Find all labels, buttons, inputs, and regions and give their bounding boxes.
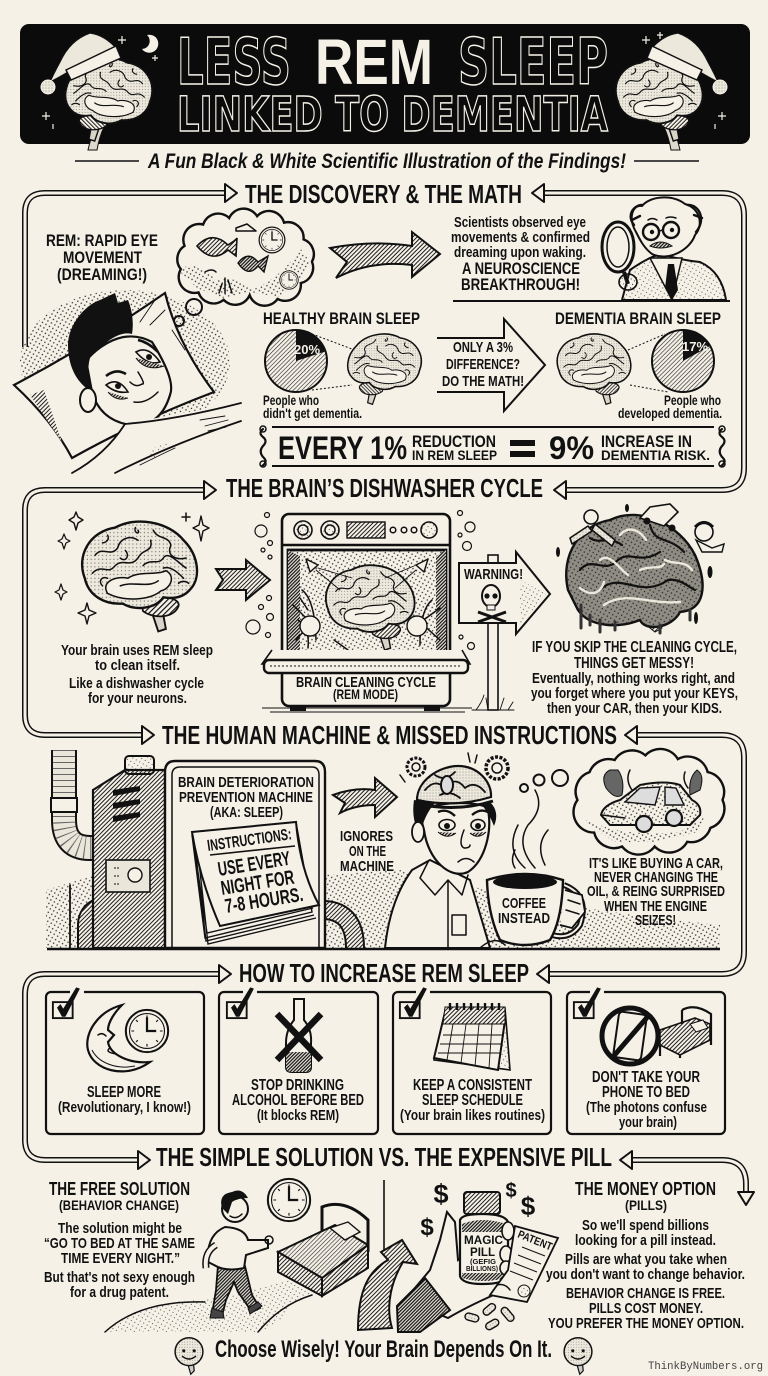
chart: dementia brain sleep: People who: [664, 392, 721, 408]
bed: [278, 1204, 368, 1296]
text: if you skip the cleaning cycle: then your CAR, then your KIDS.: [547, 700, 722, 717]
panel: don't take your phone to bed: [567, 985, 725, 1134]
section heading: simple solution vs expensive pill: THE SIMPLE SOLUTION VS. THE EXPENSIVE PILL: [156, 1142, 612, 1172]
card text: PHONE TO BED: [602, 1084, 690, 1101]
text: it's like buying a car: WHEN THE ENGINE: [604, 898, 707, 915]
callout: every 1 percent equals 9 percent: INCREASE IN: [601, 432, 692, 451]
section heading: the brain's dishwasher cycle: THE BRAIN’S DISHWASHER CYCLE: [226, 473, 543, 503]
text: scientists observed: movements & confirmed: [451, 229, 590, 246]
icon: moon and clock: [87, 1005, 168, 1071]
card text: SLEEP MORE: [87, 1084, 161, 1101]
arrow: dream to discovery: [330, 232, 440, 278]
pie: 20 percent: [265, 330, 327, 392]
dishwasher label: BRAIN CLEANING CYCLE: [296, 674, 436, 691]
text: scientists observed: dreaming upon waking.: [454, 244, 586, 261]
arrow: behaviour to pill: [358, 1240, 417, 1330]
text: if you skip the cleaning cycle: [531, 639, 738, 717]
coffee mug: INSTEAD: [498, 910, 550, 927]
title text: REM: [315, 26, 433, 98]
card text: ALCOHOL BEFORE BED: [232, 1092, 364, 1109]
text: it's like buying a car: SEIZES!: [635, 912, 676, 929]
text: scientists observed: BREAKTHROUGH!: [461, 275, 580, 294]
bottle: (GEFIG: [470, 1259, 497, 1266]
pie: 17 percent: 17%: [682, 339, 708, 354]
text: the free solution: The solution might be: [58, 1220, 182, 1237]
thought dots: [520, 770, 568, 792]
text: the money option: [546, 1179, 745, 1332]
text: scientists observed: [451, 214, 590, 294]
instructions note: 7-8 HOURS.: [223, 884, 305, 918]
shirt: [385, 860, 490, 948]
icon: checkbox: [400, 988, 426, 1018]
text: the money option: Pills are what you take when: [565, 1251, 727, 1268]
pills: [464, 1302, 515, 1331]
icon: checkbox: [574, 988, 600, 1018]
patent document: [490, 1226, 558, 1302]
icon: dementia brain: [557, 334, 631, 404]
instructions note: NIGHT FOR: [219, 867, 296, 900]
title text: LINKED TO DEMENTIA: [177, 87, 608, 143]
icon: overheating car thought cloud: [574, 749, 724, 855]
bottle: PILL: [470, 1245, 495, 1259]
text: the free solution: But that's not sexy enough: [44, 1269, 195, 1286]
credit: ThinkByNumbers.org: [648, 1361, 763, 1373]
icon: bed: [660, 1007, 711, 1058]
bottle: [460, 1192, 508, 1284]
dishwasher label: [296, 674, 436, 702]
card text: [232, 1077, 364, 1124]
machine front panel: [165, 761, 325, 948]
card text: DON'T TAKE YOUR: [592, 1069, 700, 1086]
callout: every 1 percent equals 9 percent: DEMENTIA RISK.: [601, 447, 710, 463]
subtitle: A Fun Black & White Scientific Illustration of the Findings!: [147, 150, 626, 173]
icon: healthy brain: [348, 334, 421, 404]
panel: sleep more: [46, 985, 204, 1134]
title text: LESS: [177, 26, 291, 100]
arrow: only a 3 percent difference: DO THE MATH!: [442, 373, 524, 390]
instructions note: USE EVERY: [216, 848, 292, 881]
text: REM definition: (DREAMING!): [57, 265, 147, 284]
text: ignores on the machine: ON THE: [349, 843, 386, 860]
footer message: [175, 1336, 592, 1374]
keys: [570, 510, 615, 546]
text: scientists observed: Scientists observed eye: [454, 214, 586, 231]
card text: KEEP A CONSISTENT: [413, 1077, 532, 1094]
text: REM definition: MOVEMENT: [63, 248, 142, 267]
icon: walking man to bed with clock: [105, 1179, 368, 1332]
text: the money option: PILLS COST MONEY.: [589, 1300, 703, 1317]
text: the money option: looking for a pill instead.: [575, 1232, 716, 1249]
chart: dementia brain sleep: [555, 309, 722, 421]
callout: every 1 percent equals 9 percent: [260, 426, 725, 467]
icon: clean brain with sparkles: [55, 512, 209, 631]
card text: (Your brain likes routines): [400, 1107, 545, 1124]
text: the free solution: TIME EVERY NIGHT.”: [61, 1250, 180, 1267]
arrow: brain to dishwasher: [216, 560, 270, 600]
icon: smiling brain right: [564, 1338, 592, 1374]
icon: no phone: [602, 1008, 658, 1064]
kid: [695, 522, 724, 552]
machine label: PREVENTION MACHINE: [179, 789, 313, 806]
card text: (Revolutionary, I know!): [58, 1099, 191, 1116]
text: the free solution: for a drug patent.: [70, 1284, 169, 1301]
head: [86, 336, 171, 425]
panel: keep a consistent schedule: [393, 985, 551, 1134]
text: the free solution: (BEHAVIOR CHANGE): [59, 1197, 179, 1213]
card text: [400, 1077, 545, 1124]
panel: stop drinking alcohol: [219, 985, 378, 1134]
car: [640, 504, 678, 532]
arrow: ignores machine: [333, 778, 397, 817]
icon: right brain with nightcap: [616, 32, 727, 150]
card text: (The photons confuse: [586, 1099, 707, 1116]
text: ignores on the machine: IGNORES: [340, 828, 393, 845]
car: [601, 782, 700, 832]
text: the free solution: THE FREE SOLUTION: [49, 1179, 190, 1199]
bottle: MAGIC: [464, 1233, 503, 1247]
wash chamber: [288, 550, 446, 652]
card text: [586, 1069, 707, 1131]
speckled path: [105, 1272, 322, 1332]
card text: [58, 1084, 191, 1116]
icon: smiling brain left: [175, 1338, 203, 1374]
section heading: the discovery and the math: THE DISCOVERY & THE MATH: [245, 179, 522, 209]
text: your brain uses REM sleep: to clean itself.: [95, 657, 180, 674]
chart: dementia brain sleep: developed dementia.: [618, 405, 722, 421]
card text: SLEEP SCHEDULE: [422, 1092, 523, 1109]
machine label: [178, 774, 314, 821]
text: your brain uses REM sleep: Your brain uses REM sleep: [61, 642, 213, 659]
drips: [581, 605, 690, 633]
connector frames: [25, 184, 754, 1205]
panel: sleeping man in bed: [14, 290, 241, 473]
card text: STOP DRINKING: [251, 1077, 344, 1094]
icon: warning sign with skull: WARNING!: [464, 566, 523, 583]
man: [206, 1190, 273, 1318]
instructions note: INSTRUCTIONS:: [206, 826, 293, 855]
card text: your brain): [619, 1114, 677, 1131]
pipes: [51, 750, 355, 948]
text: the money option: So we'll spend billions: [582, 1217, 709, 1234]
card text: (It blocks REM): [257, 1107, 339, 1124]
coffee mug: COFFEE: [502, 895, 546, 912]
bubbles: [246, 510, 475, 650]
title text: SLEEP: [458, 26, 608, 100]
arrow: only a 3 percent difference: DIFFERENCE?: [446, 356, 520, 373]
bottle: BILLIONS): [466, 1266, 498, 1273]
text: the money option: THE MONEY OPTION: [575, 1179, 716, 1199]
icon: crossed out bottle: [277, 999, 321, 1072]
text: it's like buying a car: IT'S LIKE BUYING A CAR,: [589, 855, 723, 872]
dollar signs: $: [433, 1179, 449, 1209]
machine label: BRAIN DETERIORATION: [178, 774, 314, 791]
icon: scientist with magnifier: [453, 197, 730, 301]
face: [420, 803, 489, 874]
pie: 17 percent: [652, 330, 714, 392]
text: REM definition: [46, 231, 158, 284]
text: ignores on the machine: [340, 828, 394, 875]
pie: 20 percent: 20%: [294, 342, 320, 357]
machine label: (AKA: SLEEP): [210, 804, 283, 821]
section heading: the human machine and missed instructions: THE HUMAN MACHINE & MISSED INSTRUCTIONS: [162, 720, 617, 750]
text: ignores on the machine: MACHINE: [340, 858, 394, 875]
section heading: how to increase REM sleep: HOW TO INCREASE REM SLEEP: [239, 958, 529, 988]
dollar signs: $: [521, 1191, 536, 1221]
clock: [268, 1179, 310, 1221]
smoke: [604, 770, 623, 796]
text: it's like buying a car: NEVER CHANGING THE: [594, 869, 718, 886]
icon: calendar: [434, 1003, 510, 1070]
steam: [512, 790, 548, 868]
callout: every 1 percent equals 9 percent: EVERY 1%: [278, 430, 407, 466]
thought dots: [162, 299, 202, 333]
icon: dream thought bubble: [162, 209, 314, 333]
callout: every 1 percent equals 9 percent: REDUCTION: [412, 432, 496, 451]
dollar signs: $: [505, 1180, 517, 1202]
pillow: [14, 293, 214, 458]
dishwasher label: (REM MODE): [333, 686, 398, 702]
icon: checkbox: [227, 988, 253, 1018]
ground shading: [46, 870, 720, 948]
text: your brain uses REM sleep: [61, 642, 213, 707]
text: if you skip the cleaning cycle: THINGS GET MESSY!: [574, 655, 694, 672]
icon: warning sign with skull: [459, 552, 550, 710]
coffee mug: [480, 874, 585, 948]
text: the free solution: [44, 1179, 195, 1301]
icon: messy brain with keys car and kid: [556, 504, 724, 633]
divider: [383, 1180, 385, 1255]
text: your brain uses REM sleep: for your neurons.: [88, 690, 187, 707]
chart: dementia brain sleep: DEMENTIA BRAIN SLEEP: [555, 309, 721, 328]
callout: every 1 percent equals 9 percent: 9%: [549, 430, 594, 466]
footer message: Choose Wisely! Your Brain Depends On It.: [215, 1336, 552, 1363]
icon: left brain with nightcap: [41, 33, 158, 150]
title banner: [20, 24, 750, 150]
text: the free solution: “GO TO BED AT THE SAME: [44, 1235, 195, 1252]
title text: [177, 26, 608, 143]
skull and crossbones: [478, 585, 506, 622]
door: [262, 650, 470, 664]
text: your brain uses REM sleep: Like a dishwasher cycle: [69, 675, 204, 692]
controls: [294, 521, 437, 539]
text: it's like buying a car: [587, 855, 725, 929]
chart: healthy brain sleep: [263, 309, 421, 421]
arrow: only a 3 percent difference: ONLY A 3%: [453, 339, 513, 356]
callout: every 1 percent equals 9 percent: IN REM SLEEP: [412, 447, 497, 463]
dollar signs: [420, 1179, 536, 1241]
text: the money option: (PILLS): [625, 1197, 667, 1213]
icon: brain deterioration prevention machine: [51, 750, 355, 948]
icon: checkbox: [53, 988, 79, 1018]
chart: healthy brain sleep: People who: [263, 392, 319, 408]
chart: healthy brain sleep: didn't get dementia.: [263, 405, 362, 421]
icon: tired man with exposed brain and coffee: [385, 753, 585, 948]
chart: healthy brain sleep: HEALTHY BRAIN SLEEP: [263, 309, 420, 328]
icon: dishwasher brain cleaning cycle: [246, 510, 475, 712]
gears: [407, 758, 425, 776]
text: REM definition: REM: RAPID EYE: [46, 231, 158, 250]
patent document: PATENT: [516, 1229, 554, 1253]
exposed brain: [417, 766, 491, 803]
dollar signs: $: [420, 1214, 434, 1241]
blanket: [72, 403, 241, 473]
instructions note: [192, 822, 319, 944]
text: scientists observed: A NEUROSCIENCE: [462, 259, 580, 278]
icon: hand holding magic pill bottle: [397, 1179, 558, 1332]
arrow: only a 3 percent difference: [437, 319, 545, 411]
